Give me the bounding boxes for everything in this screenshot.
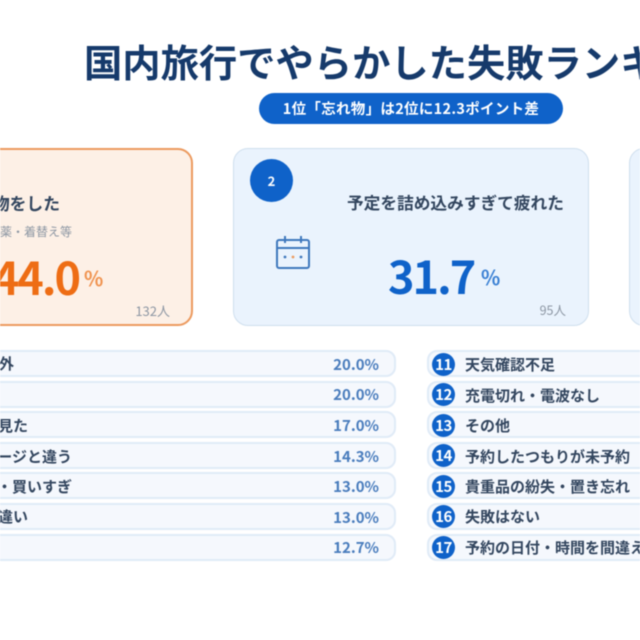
row rank 5 xyxy=(0,381,396,408)
label rank 11: 天気確認不足 xyxy=(465,354,555,375)
badge 13: 13 xyxy=(435,415,452,436)
value rank 7: 14.3% xyxy=(333,446,379,467)
badge 11 xyxy=(432,353,455,376)
badge 15 xyxy=(432,475,455,498)
badge 16: 16 xyxy=(435,506,452,527)
rank 2 label: 予定を詰め込みすぎて疲れた xyxy=(347,190,564,214)
rank 1 percent sign: % xyxy=(84,263,103,292)
label rank 14: 予約したつもりが未予約 xyxy=(465,446,630,467)
rank 2 value: 31.7 xyxy=(388,242,474,307)
row rank 4 xyxy=(0,350,396,377)
badge 15: 15 xyxy=(435,476,452,497)
value rank 6: 17.0% xyxy=(333,415,379,436)
row rank 9 xyxy=(0,503,396,530)
panel: ranking list right column xyxy=(426,350,640,562)
badge 17: 17 xyxy=(435,537,452,558)
icon: calendar xyxy=(275,235,311,270)
label rank 12: 充電切れ・電波なし xyxy=(465,385,600,406)
row rank 14 xyxy=(427,442,640,469)
row rank 6 xyxy=(0,411,396,438)
value rank 8: 13.0% xyxy=(333,476,379,497)
value rank 9: 13.0% xyxy=(333,507,379,528)
panel: rank 1 card xyxy=(0,148,193,326)
badge 13 xyxy=(432,414,455,437)
rank 2 count: 95人 xyxy=(540,300,566,319)
rank 2 badge: 2 xyxy=(268,171,275,190)
row rank 11 xyxy=(427,350,640,377)
panel: ranking list left column xyxy=(0,350,396,562)
row rank 10 xyxy=(0,534,396,561)
value rank 10: 12.7% xyxy=(333,537,379,558)
label rank 15: 貴重品の紛失・置き忘れ xyxy=(465,476,630,497)
row rank 13 xyxy=(427,411,640,438)
badge 17 xyxy=(432,536,455,559)
row rank 17 xyxy=(427,534,640,561)
row rank 16 xyxy=(427,503,640,530)
label rank 16: 失敗はない xyxy=(465,506,540,527)
badge 16 xyxy=(432,505,455,528)
summary pill: 1位「忘れ物」は2位に12.3ポイント差 xyxy=(283,98,539,119)
row rank 8 xyxy=(0,472,396,499)
badge 14: 14 xyxy=(435,445,452,466)
row rank 12 xyxy=(427,381,640,408)
badge 12 xyxy=(432,383,455,406)
row rank 7 xyxy=(0,442,396,469)
label rank 13: その他 xyxy=(465,415,510,436)
value rank 5: 20.0% xyxy=(333,384,379,405)
summary pill xyxy=(259,93,563,124)
rank 1 count: 132人 xyxy=(135,301,170,320)
rank 2 percent sign: % xyxy=(481,262,500,291)
badge 12: 12 xyxy=(435,384,452,405)
label rank 17: 予約の日付・時間を間違え xyxy=(465,537,640,558)
value rank 4: 20.0% xyxy=(333,354,379,375)
panel: rank 3 card xyxy=(629,148,640,326)
row rank 15 xyxy=(427,472,640,499)
badge 11: 11 xyxy=(435,354,452,375)
rank 2 badge xyxy=(250,159,293,202)
panel: rank 2 card xyxy=(233,148,589,326)
badge 14 xyxy=(432,444,455,467)
